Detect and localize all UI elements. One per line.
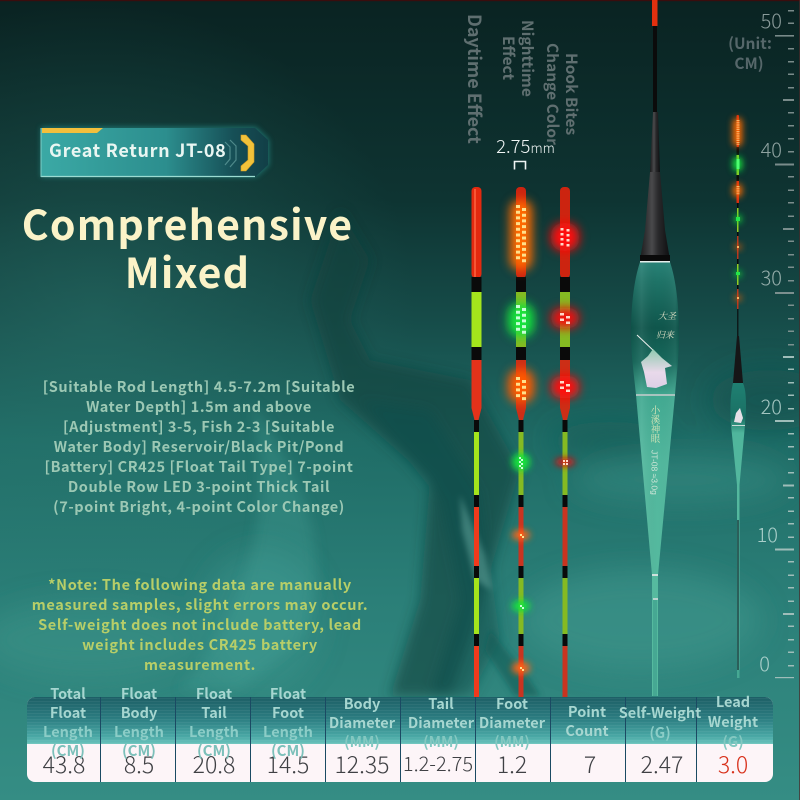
spec text block (43, 376, 355, 517)
table header labels: Weight (708, 711, 758, 732)
float: nighttime effect (508, 187, 534, 697)
table header labels: Tail (201, 702, 227, 723)
table header labels: Diameter (329, 712, 395, 733)
spec table (27, 697, 773, 782)
ruler numbers: 10 (757, 519, 778, 548)
float: daytime effect (472, 187, 482, 697)
label: daytime effect: Daytime Effect (462, 14, 488, 144)
ruler numbers: 20 (761, 391, 782, 420)
table header labels: (CM) (271, 740, 305, 761)
table header labels: Float (270, 683, 306, 704)
large float (631, 0, 679, 696)
float body brand text: 归来 (656, 328, 675, 341)
spec table: 1.2 (497, 746, 527, 780)
label: hook bites change color: Hook Bites (561, 53, 583, 135)
note text block: Self-weight does not include battery, lead (38, 614, 362, 635)
spec table: 8.5 (124, 746, 154, 780)
table header labels: Length (114, 721, 164, 742)
badge chevron (241, 135, 254, 171)
ruler numbers (757, 5, 782, 677)
ruler scale (775, 10, 794, 678)
label: nighttime effect: Effect (498, 36, 520, 80)
title: Mixed (125, 240, 250, 300)
LED glows: color change (551, 223, 579, 466)
table header labels: Float (121, 683, 157, 704)
spec table: 14.5 (267, 746, 309, 780)
note text block: weight includes CR425 battery (82, 634, 318, 655)
dimension bracket 2.75mm (514, 162, 526, 170)
table header labels: Diameter (408, 712, 474, 733)
badge accent (42, 128, 103, 133)
table header labels: (MM) (423, 731, 459, 752)
product name badge (41, 127, 269, 177)
table header labels: (CM) (122, 740, 156, 761)
table header labels: (CM) (197, 740, 231, 761)
table values (43, 746, 748, 780)
note text block: measurement. (144, 654, 256, 675)
spec table: 20.8 (193, 746, 235, 780)
spec text block: [Suitable Rod Length] 4.5-7.2m [Suitable (43, 376, 355, 397)
ruler numbers: 0 (759, 648, 770, 677)
unit label: (Unit: (728, 32, 772, 54)
spec table: 43.8 (43, 746, 85, 780)
table header labels: Float (196, 683, 232, 704)
table header labels: Body (121, 702, 157, 723)
spec table: 7 (584, 746, 596, 780)
unit label (728, 32, 772, 74)
note text block: *Note: The following data are manually (48, 574, 352, 595)
float body figure (637, 335, 672, 388)
table header labels: Length (263, 721, 313, 742)
table header labels: Foot (272, 702, 304, 723)
title (22, 192, 353, 300)
spec text block: (7-point Bright, 4-point Color Change) (53, 496, 345, 517)
table header band (27, 697, 773, 744)
ruler numbers: 40 (761, 134, 782, 163)
spec text block: Water Body] Reservoir/Black Pit/Pond (54, 436, 344, 457)
large float: JT-08 ≈3.0g (650, 450, 660, 495)
table header labels: (G) (649, 722, 671, 743)
spec text block: Double Row LED 3-point Thick Tail (68, 476, 330, 497)
spec table: 2.47 (641, 746, 683, 780)
label: hook bites change color (542, 43, 583, 145)
note text block (32, 574, 368, 675)
table header labels: Total (50, 683, 86, 704)
small float LED glows (733, 118, 742, 300)
table header labels: (CM) (51, 740, 85, 761)
spec text block: [Battery] CR425 [Float Tail Type] 7-point (45, 456, 353, 477)
note text block: measured samples, slight errors may occur. (32, 594, 368, 615)
table header labels: Point (568, 701, 606, 722)
unit label: CM) (734, 52, 764, 74)
title: Comprehensive (22, 192, 353, 252)
table header labels: Float (50, 702, 86, 723)
spec table: 3.0 (718, 746, 748, 780)
LED glows: nighttime (508, 200, 534, 674)
table header labels: Tail (428, 693, 454, 714)
float body brand text: 大圣 (658, 309, 677, 322)
table header labels: Length (43, 721, 93, 742)
dimension label: 2.75mm (496, 133, 555, 159)
table header labels: Count (565, 720, 609, 741)
table header labels: Lead (716, 691, 750, 712)
spec table: 1.2-2.75 (403, 748, 473, 777)
table header labels: Diameter (479, 712, 545, 733)
table header labels: Foot (496, 693, 528, 714)
table header labels: Body (344, 693, 380, 714)
small scale float with LEDs (730, 115, 746, 678)
table header labels: Length (189, 721, 239, 742)
table header labels: (G) (722, 731, 744, 752)
spec text block: [Adjustment] 3-5, Fish 2-3 [Suitable (63, 416, 335, 437)
float body model text: 小溪神眼 (648, 404, 662, 444)
ruler numbers: 30 (761, 262, 782, 291)
spec table: 12.35 (334, 746, 389, 780)
ruler numbers: 50 (761, 5, 782, 34)
label: nighttime effect: Nighttime (517, 20, 539, 96)
float body brand text (656, 309, 677, 341)
table header labels: (MM) (344, 731, 380, 752)
table header labels: (MM) (494, 731, 530, 752)
table header labels: Self-Weight (619, 702, 701, 723)
label: hook bites change color: Change Color (542, 43, 564, 145)
badge text: Great Return JT-08 (49, 137, 226, 163)
float: hook bites change color (551, 187, 579, 697)
label: nighttime effect (498, 20, 539, 96)
spec text block: Water Depth] 1.5m and above (86, 396, 312, 417)
